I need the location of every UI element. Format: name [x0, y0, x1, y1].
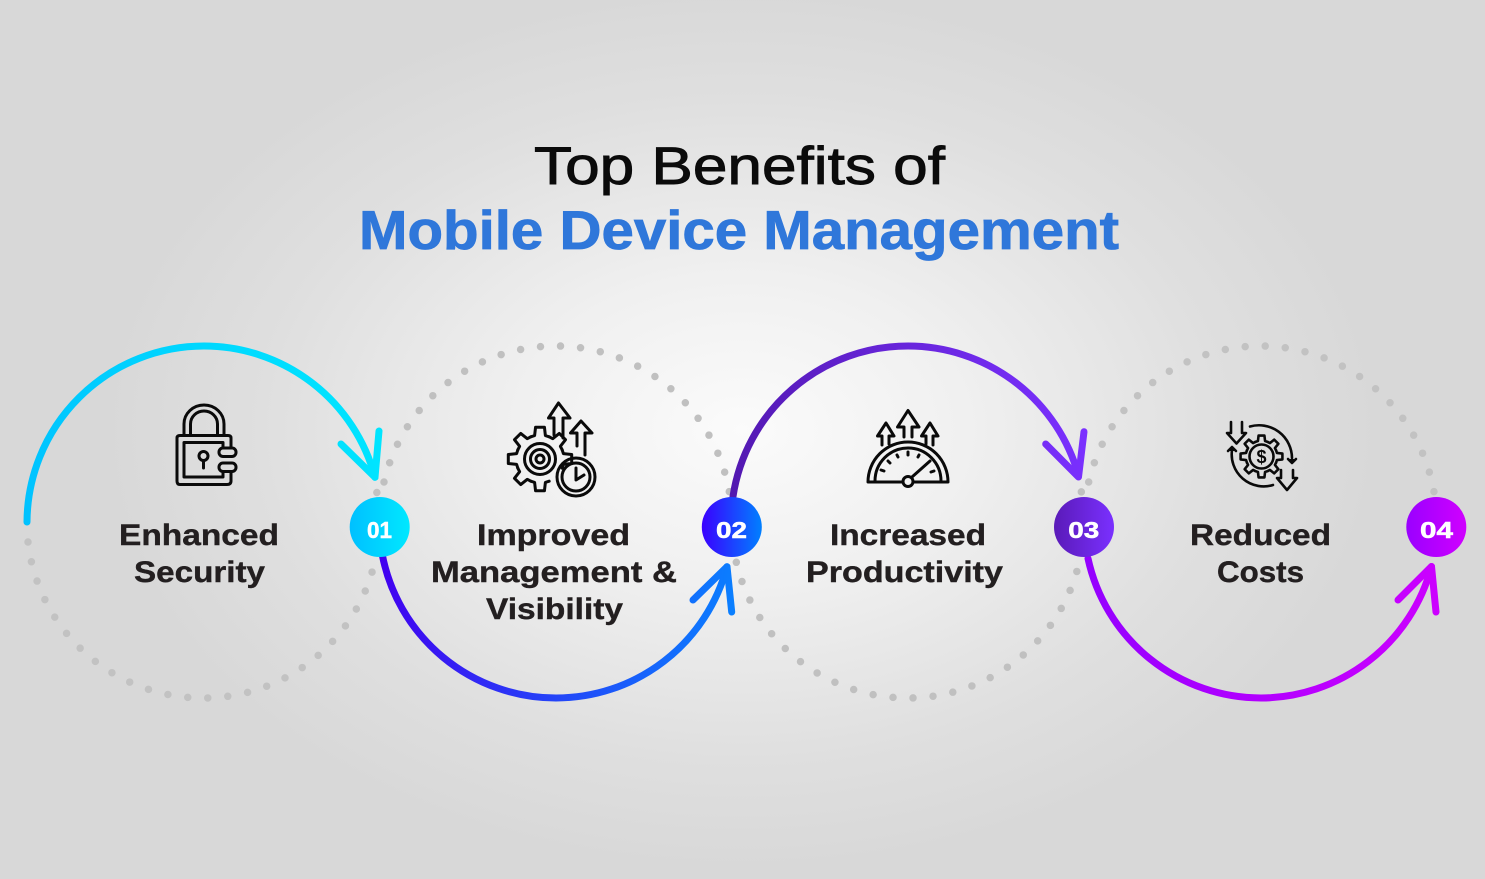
label: Increased Productivity: Productivity	[806, 556, 1003, 589]
label: Improved Management & Visibility: Visibility	[486, 593, 623, 626]
icon: padlock	[177, 405, 236, 484]
label: Reduced Costs: Reduced	[1190, 519, 1331, 552]
badge 03	[1054, 497, 1114, 557]
label: Increased Productivity	[806, 519, 1003, 589]
label: Enhanced Security: Enhanced	[119, 519, 279, 552]
arrow 4	[1088, 558, 1436, 698]
label: Enhanced Security: Security	[134, 556, 265, 589]
badge 03: 03	[1068, 517, 1099, 543]
dotted arc 2	[384, 346, 729, 492]
arrow 3	[733, 346, 1084, 496]
title: Mobile Device Management	[359, 199, 1119, 261]
label: Increased Productivity: Increased	[830, 519, 986, 552]
title	[359, 137, 1119, 261]
badge 01	[350, 497, 410, 557]
icon: dollar gear and cost arrows	[1227, 422, 1297, 490]
dotted arc 1	[28, 492, 379, 698]
badge 01: 01	[367, 517, 392, 543]
arrow 2	[382, 553, 732, 698]
label: Reduced Costs	[1190, 519, 1331, 589]
label: Enhanced Security	[119, 519, 279, 589]
dotted arc 3	[736, 492, 1084, 698]
label: Reduced Costs: Costs	[1217, 556, 1304, 589]
label: Improved Management & Visibility	[431, 519, 677, 626]
badge 04	[1406, 497, 1466, 557]
badge 04: 04	[1420, 517, 1453, 543]
icon: dollar gear and cost arrows: $	[1256, 447, 1267, 467]
badge 02	[702, 497, 762, 557]
label: Improved Management & Visibility: Improved	[477, 519, 630, 552]
icon: gear, clock and arrows	[508, 403, 595, 496]
arrow 1	[27, 346, 379, 522]
icon: speedometer and arrows	[868, 410, 948, 486]
badge 02: 02	[716, 517, 747, 543]
title: Top Benefits of	[534, 137, 945, 196]
dotted arc 4	[1089, 346, 1434, 492]
label: Improved Management & Visibility: Management &	[431, 556, 677, 589]
